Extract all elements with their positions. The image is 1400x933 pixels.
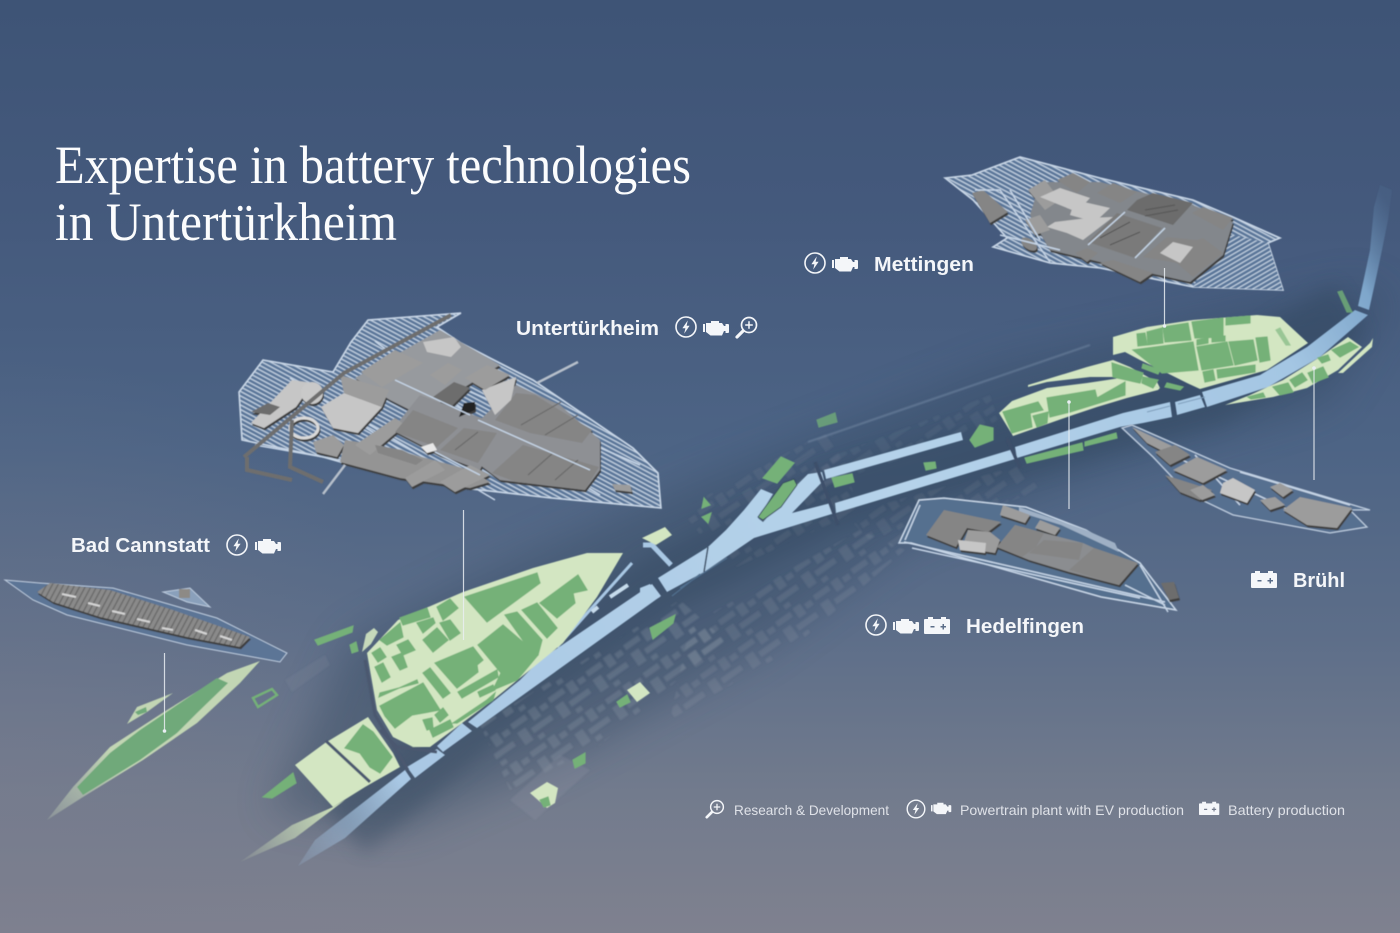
label: Bad Cannstatt: Bad Cannstatt — [71, 535, 210, 557]
icon: lightning — [805, 253, 825, 273]
legend: research and development: Research & Development — [734, 802, 889, 818]
legend — [707, 800, 1345, 818]
river segments — [298, 185, 1392, 866]
bridges and river lines — [672, 397, 1205, 596]
park and lawn south-west — [240, 660, 437, 862]
connector: Hedelfingen — [1067, 400, 1071, 509]
legend: powertrain plant: Powertrain plant with EV production — [960, 802, 1184, 818]
label: Mettingen: Mettingen — [874, 254, 974, 276]
icon: lightning — [676, 317, 696, 337]
label: Untertürkheim: Untertürkheim — [516, 318, 659, 340]
icon: engine — [893, 619, 919, 634]
canals and rail yard — [557, 545, 671, 647]
factory: Untertürkheim — [239, 313, 661, 508]
factory: Brühl — [1122, 425, 1370, 533]
river map — [47, 185, 1392, 866]
factory: Hedelfingen — [899, 498, 1179, 612]
icon: battery — [924, 617, 950, 634]
elevated roads — [244, 315, 451, 482]
label: Mettingen — [805, 253, 974, 276]
icon: engine — [255, 539, 281, 554]
label: Untertürkheim — [516, 317, 756, 340]
connector lines — [163, 268, 1316, 733]
label: Bad Cannstatt — [71, 535, 281, 557]
icon: engine — [703, 321, 729, 336]
small green plots — [263, 291, 1352, 798]
factory: Bad Cannstatt — [5, 580, 287, 662]
icon: magnifier — [737, 318, 756, 337]
legend: battery production: Battery production — [1228, 802, 1345, 818]
icon: lightning — [866, 615, 886, 635]
small plot details — [253, 689, 630, 807]
connector: Brühl — [1312, 366, 1316, 480]
title: in Untertürkheim — [55, 192, 397, 252]
small light plots — [362, 527, 672, 808]
title — [55, 135, 691, 252]
connector: Untertürkheim — [462, 510, 464, 640]
label: Hedelfingen — [866, 615, 1084, 638]
label: Hedelfingen: Hedelfingen — [966, 616, 1084, 638]
Untertürkheim green site — [367, 553, 623, 747]
surrounding city blocks — [285, 345, 1090, 820]
map shadow band along the river — [270, 285, 1390, 830]
connector: Bad Cannstatt — [163, 653, 166, 733]
Mettingen green site — [999, 315, 1308, 436]
title: Expertise in battery technologies — [55, 135, 691, 195]
factory: Mettingen — [945, 157, 1283, 290]
icon: lightning — [227, 535, 247, 555]
label: Brühl: Brühl — [1293, 570, 1345, 592]
icon: battery — [1251, 571, 1277, 588]
connector: Mettingen — [1163, 268, 1166, 328]
Bad Cannstatt green site — [47, 661, 260, 820]
Brühl green site — [1225, 337, 1373, 405]
icon: engine — [832, 257, 858, 272]
label: Brühl — [1251, 570, 1345, 592]
